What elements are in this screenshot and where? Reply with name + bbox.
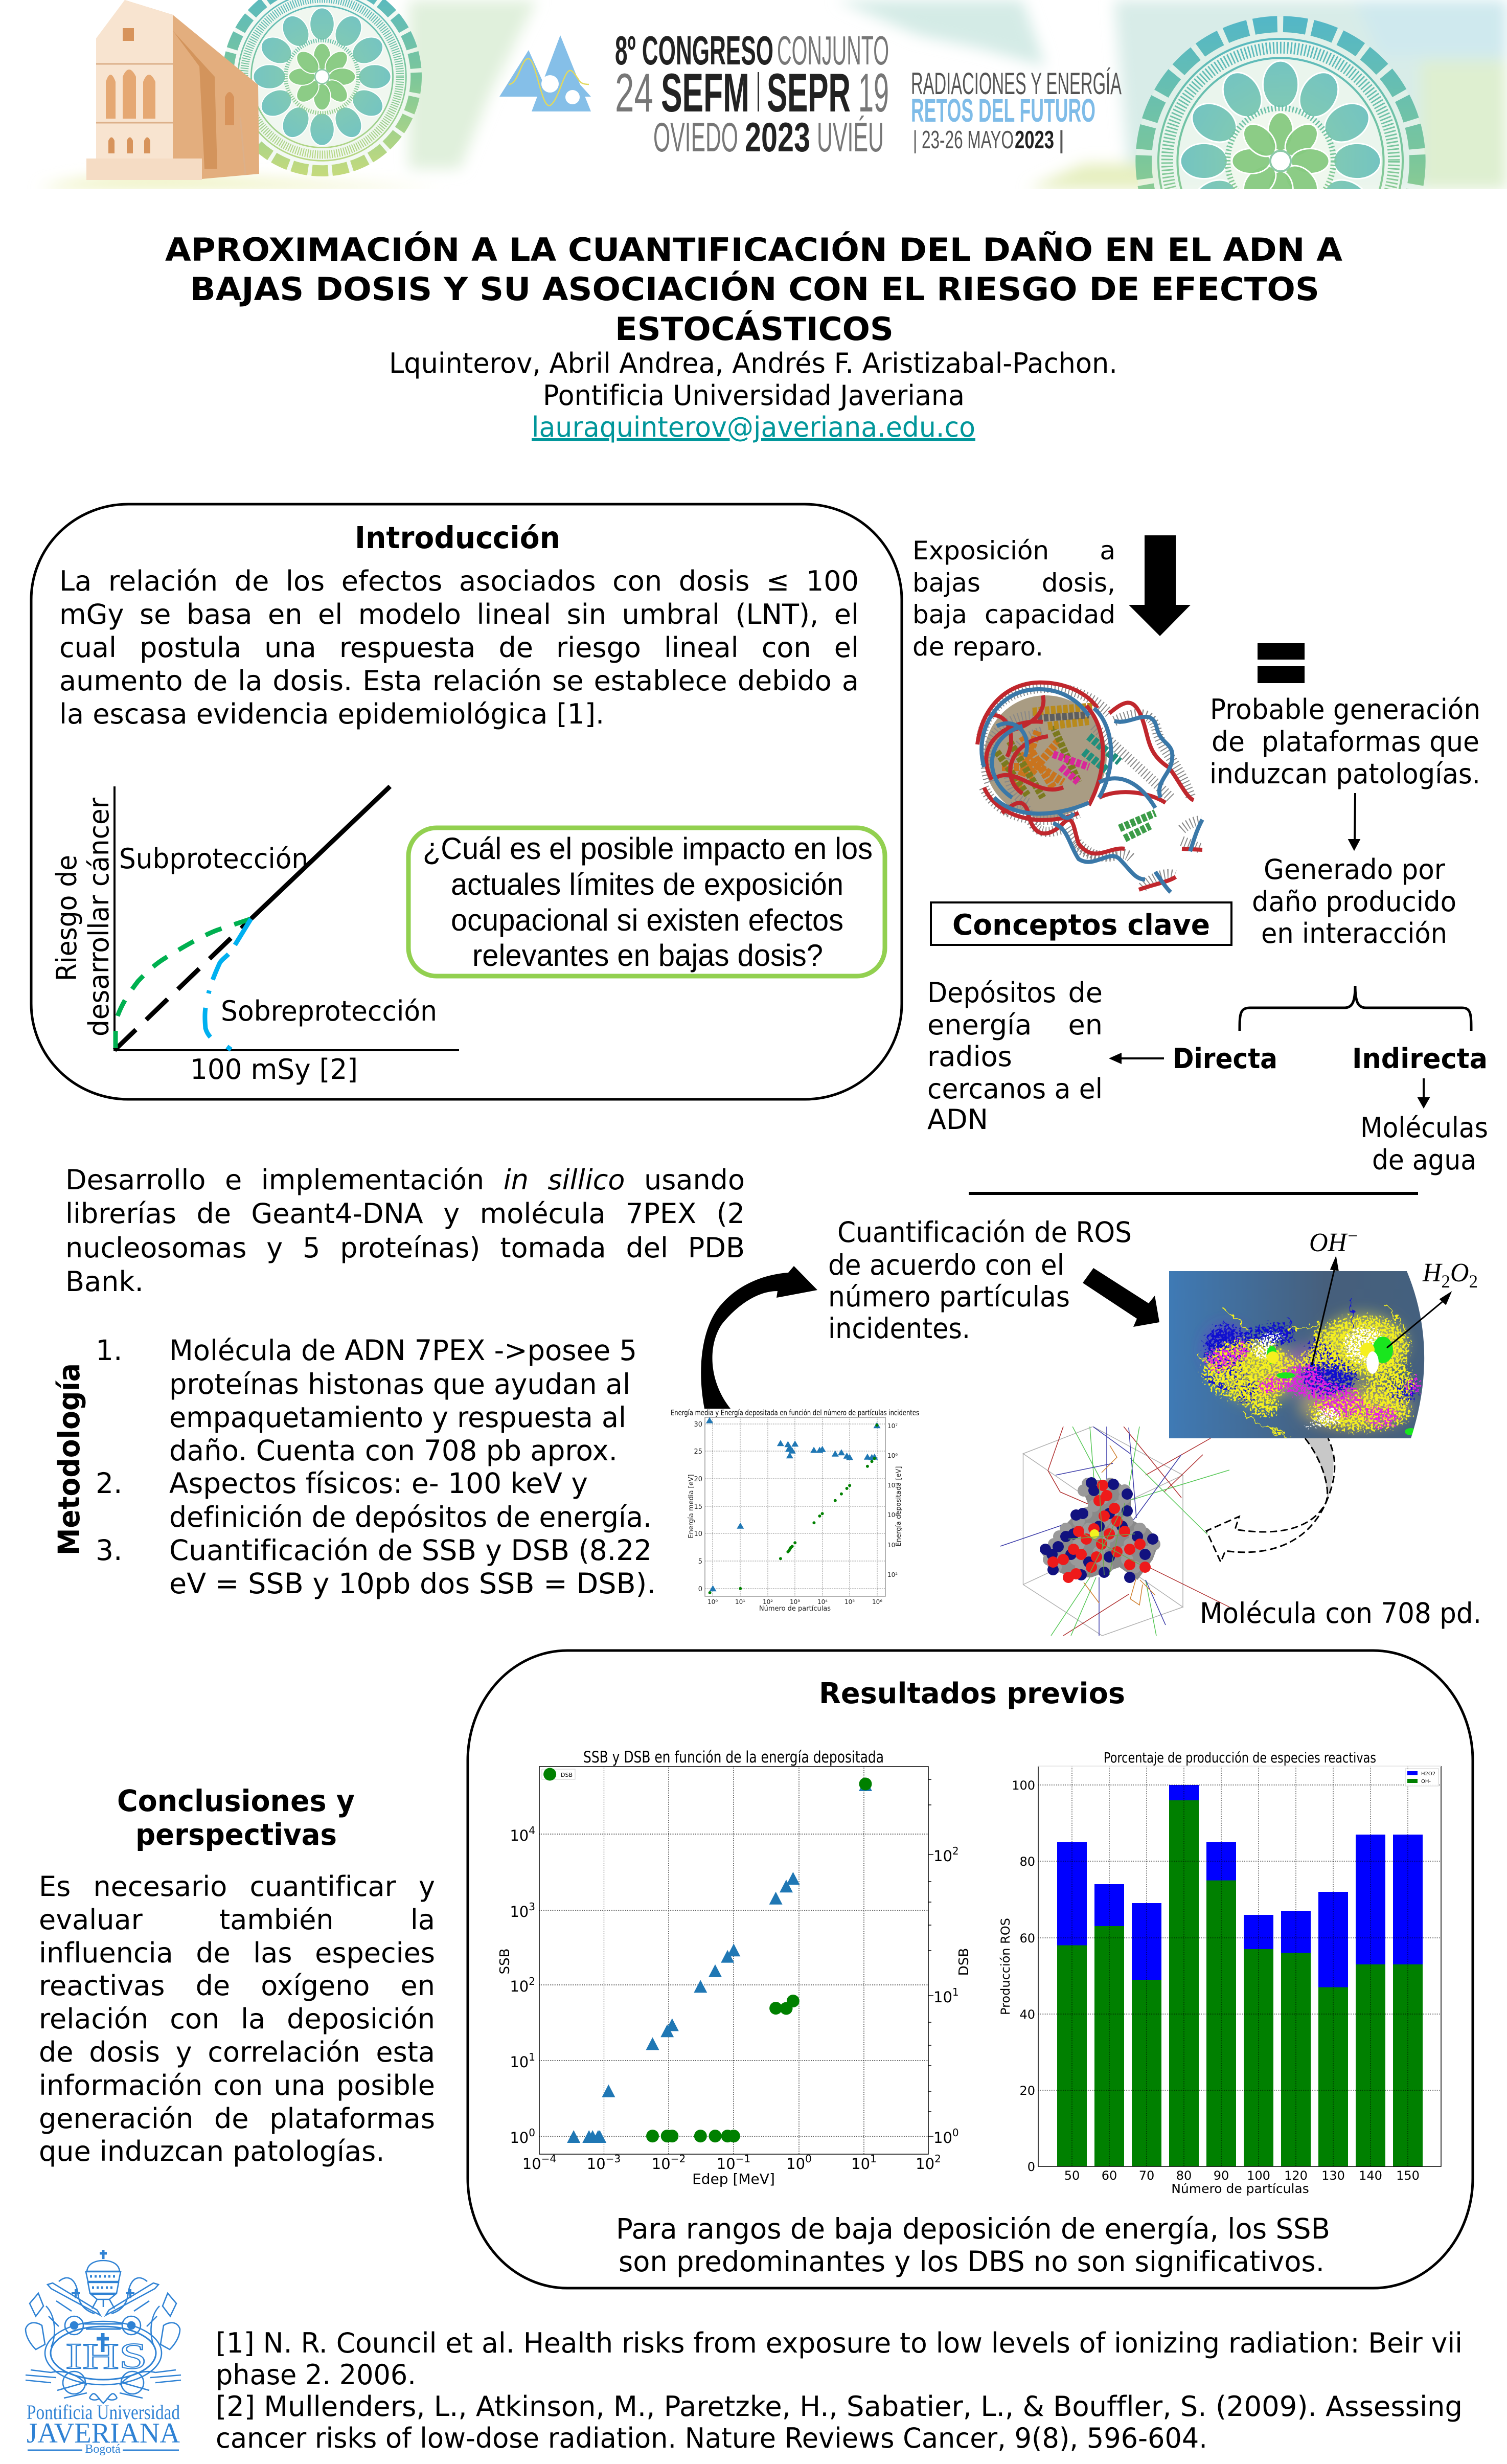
chart: energía media y depositada: 15 [694,1503,702,1511]
text: exposición [912,535,1115,668]
text: desarrollo: nucleosomas y 5 proteínas) tomada del PDB [65,1232,745,1264]
congress name [615,36,1122,153]
heading: conclusiones: perspectivas [135,1817,337,1852]
congress name: RADIACIONES Y ENERGÍA [911,66,1122,101]
panel: metodología [52,1163,1481,1636]
chart: energía media y depositada: 25 [694,1448,702,1456]
chart: SSB y DSB: DSB [956,1948,972,1976]
text: depósitos de energía: energía [927,1009,1032,1041]
box: conceptos clave: Conceptos clave [952,909,1210,942]
chart: porcentaje ROS: 80 [1176,2168,1192,2183]
chart: SSB y DSB: 0 [529,2127,535,2139]
congress name: UVIÉU [817,115,884,161]
list: pasos: Cuantificación de SSB y DSB (8.22 [169,1534,652,1567]
authors and affiliation: Lquinterov, Abril Andrea, Andrés F. Aristizabal-Pachon. [389,347,1117,379]
references [216,2327,1463,2454]
text: moléculas de agua [1360,1112,1488,1176]
chart: energía media y depositada: 10⁴ [817,1598,828,1606]
intro text: aumento de la dosis. Esta relación se establece debido a [59,665,859,697]
chart: porcentaje ROS: 80 [1019,1855,1035,1869]
y-axis label [51,797,115,1036]
panel: conceptos clave [912,535,1488,1176]
text: probable generación: de plataformas que [1212,726,1479,758]
chart: SSB y DSB: 10 [510,1827,529,1844]
text: desarrollo: Desarrollo e implementación in sillico usando [65,1164,745,1196]
divider line [969,1192,1418,1195]
chart: SSB y DSB: 0 [952,2127,959,2139]
chart: SSB y DSB: 10 [933,1988,952,2006]
heading: conclusiones [117,1783,355,1852]
text: cuantificación de ROS: número partículas [828,1280,1070,1313]
chart: porcentaje ROS: Producción ROS [998,1918,1013,2015]
intro text: la escasa evidencia epidemiológica [1]. [59,698,604,730]
y-axis label: desarrollar cáncer [83,797,115,1036]
chart: SSB y DSB: SSB y DSB en función de la energía depositada [583,1748,884,1767]
chart: energía media y depositada: 10⁵ [887,1482,898,1489]
label: OH-: OH [1309,1228,1348,1257]
chart: SSB y DSB: 1 [952,1986,959,1998]
callout: research question: relevantes en bajas dosis? [472,938,823,973]
icon: equals sign [1258,643,1305,683]
chart: energía media y depositada: 10⁶ [887,1452,898,1459]
references: phase 2. 2006. [216,2359,416,2391]
references: [2] Mullenders, L., Atkinson, M., Paretzke, H., Sabatier, L., & Bouffler, S. (2009). Assessing [216,2390,1463,2423]
chart: SSB y DSB: 10 [851,2155,870,2173]
chart: SSB y DSB: 10 [510,2053,529,2071]
chart: SSB y DSB: 10 [933,1847,952,1865]
text: conclusiones: de dosis y correlación esta [39,2036,435,2068]
chart: SSB y DSB: 10 [522,2155,541,2173]
list: pasos: empaquetamiento y respuesta al [169,1401,626,1434]
chart: porcentaje ROS: Porcentaje de producción de especies reactivas [1104,1749,1376,1766]
label: OH-: − [1346,1226,1359,1246]
label: H2O2: 2 [1442,1271,1450,1292]
chart: energía media y depositada: Energía depositada [eV] [895,1466,903,1546]
image: molecule with tracks [1000,1427,1229,1636]
chart: energía media y depositada: Energía media [eV] [688,1474,695,1539]
chart: SSB y DSB: 0 [805,2153,812,2165]
university name [27,2401,180,2456]
label: H2O2: 2 [1469,1271,1478,1292]
authors and affiliation: Pontificia Universidad Javeriana [543,379,965,412]
text: conclusiones: Es necesario cuantificar y [39,1870,435,1903]
text: probable generación [1209,693,1480,790]
arrow: indirecta to moléculas [1419,1078,1428,1106]
congress name: OVIEDO [653,115,738,161]
congress name: 2023 [745,115,810,161]
chart: energía media y depositada: 10³ [887,1542,898,1549]
chart: porcentaje ROS: 60 [1102,2168,1117,2183]
list: pasos: eV = SSB y 10pb dos SSB = DSB). [169,1567,656,1600]
text: generado por: daño producido [1252,886,1456,918]
references: [1] N. R. Council et al. Health risks from exposure to low levels of ionizing radiation: Beir vii [216,2327,1463,2359]
arrow: directa to depósitos [1111,1054,1164,1063]
text: depósitos de energía: Depósitos [927,977,1056,1009]
arrow: dashed curved with gray fill [1206,1438,1335,1562]
panel: resultados previos [468,1651,1473,2288]
text: desarrollo: librerías de Geant4-DNA y molécula 7PEX (2 [65,1197,745,1230]
congress name: | [1058,126,1065,154]
text: conclusiones: evaluar también la [39,1904,435,1936]
university name: Bogotá [85,2443,121,2456]
congress name: | 23-26 MAYO [913,126,1014,154]
heading: metodología: Metodología [52,1363,86,1555]
list: pasos: definición de depósitos de energía. [169,1501,652,1533]
text: cuantificación de ROS [828,1216,1132,1345]
text: moléculas de agua: de agua [1372,1144,1476,1176]
chart: porcentaje ROS: 20 [1019,2084,1035,2098]
chart: energía media y depositada: 10¹ [735,1598,745,1606]
image: ROS tracks [1169,1271,1430,1440]
text: depósitos de energía: en [1068,1009,1103,1041]
chart: porcentaje ROS: OH- [1421,1779,1431,1784]
list: pasos: Molécula de ADN 7PEX ->posee 5 [169,1334,637,1367]
chart: porcentaje ROS: 0 [1028,2160,1035,2174]
text: exposición: baja capacidad [912,600,1115,629]
title: ESTOCÁSTICOS [615,310,894,348]
chart: energía media y depositada: 10³ [790,1598,800,1606]
university name: JAVERIANA [27,2417,180,2449]
chart: SSB y DSB: SSB [497,1949,513,1974]
text: generado por [1252,853,1456,950]
text: conclusiones: relación con la deposición [39,2003,435,2035]
label: indirecta: Indirecta [1352,1043,1488,1075]
chart: energía media y depositada [671,1408,919,1613]
authors and affiliation [389,347,1117,443]
chart: SSB y DSB: 2 [952,1845,959,1857]
title: APROXIMACIÓN A LA CUANTIFICACIÓN DEL DAÑO EN EL ADN A [165,231,1342,268]
chart: SSB y DSB: −2 [671,2153,686,2165]
arrow: H2O2 pointer [1387,1293,1450,1348]
chart: SSB y DSB: 2 [529,1975,535,1987]
title [165,231,1342,348]
icon: DNA molecule [977,683,1202,892]
chart: porcentaje ROS: 50 [1064,2168,1080,2183]
label: directa: Directa [1173,1043,1277,1075]
congress name: 2023 [1015,126,1054,154]
arrow: OH- pointer [1312,1258,1338,1365]
chart: SSB y DSB: −1 [736,2153,750,2165]
chart: porcentaje ROS: 90 [1214,2168,1229,2183]
chart: porcentaje ROS: 150 [1396,2168,1420,2183]
chart: SSB y DSB: 4 [529,1824,535,1837]
callout: research question: actuales límites de exposición [451,867,843,901]
chart: porcentaje ROS: 60 [1019,1931,1035,1946]
intro text: cual postula una respuesta de riesgo lineal con el [59,631,859,664]
arrow: diagonal black [1083,1268,1159,1327]
header banner [47,0,1507,189]
chart: energía media y depositada: 10⁷ [887,1422,898,1430]
chart: porcentaje ROS: Número de partículas [1171,2181,1309,2196]
list: pasos: proteínas histonas que ayudan al [169,1368,630,1400]
congress name: 8º CONGRESO [615,28,773,73]
callout: research question [408,828,885,976]
chart: SSB y DSB: 10 [933,2129,952,2146]
icon: congress logo [499,35,591,111]
text: conclusiones [39,1870,435,2177]
chart: energía media y depositada: Número de partículas [759,1605,831,1613]
chart: SSB y DSB: 2 [934,2153,941,2165]
rosette left [223,0,421,176]
chart: porcentaje ROS: H2O2 [1421,1771,1435,1777]
chart: energía media y depositada: 10² [887,1571,898,1578]
arrow: big down [1129,535,1191,636]
label: molécula con 708 pd: Molécula con 708 pd. [1200,1597,1481,1630]
heading: introducción: Introducción [355,520,560,555]
chart: porcentaje ROS: 120 [1284,2168,1308,2183]
text: conclusiones: influencia de las especies [39,1937,435,1969]
chart: energía media y depositada: 0 [698,1586,702,1593]
chart: SSB y DSB: 10 [510,1903,529,1920]
chart: porcentaje ROS: 100 [1247,2168,1270,2183]
panel: conclusiones y perspectivas [39,1783,435,2177]
text: depósitos de energía: cercanos a el [927,1073,1103,1105]
chart: SSB y DSB: 1 [529,2051,535,2063]
logo: Pontificia Universidad Javeriana [26,2250,181,2456]
x-axis label: 100 mSy [2] [190,1053,358,1086]
text: desarrollo: Bank. [65,1265,144,1298]
text: moléculas de agua: Moléculas [1360,1112,1488,1144]
chart: energía media y depositada: 10 [694,1530,702,1538]
chart: SSB y DSB: 1 [870,2153,877,2165]
arrow: thin down [1350,793,1359,849]
chart: SSB y DSB: −4 [541,2153,556,2165]
panel: introducción [31,504,902,1099]
text: probable generación: induzcan patologías. [1209,758,1480,790]
chart: SSB y DSB: 10 [717,2155,736,2173]
bracket [1240,986,1471,1031]
chart: energía media y depositada: 10² [763,1598,773,1606]
chart: SSB y DSB: 10 [786,2155,805,2173]
chart: SSB y DSB [497,1748,972,2187]
chart: porcentaje ROS: 70 [1139,2168,1154,2183]
university name: Pontificia Universidad [27,2401,180,2424]
heading: resultados previos: Resultados previos [819,1677,1125,1710]
list: pasos: daño. Cuenta con 708 pb aprox. [169,1434,618,1467]
chart: energía media y depositada: 20 [694,1476,702,1483]
text: depósitos de energía: ADN [927,1103,988,1136]
list: pasos: 1. [96,1334,122,1367]
congress name: RETOS DEL FUTURO [911,92,1095,129]
arrow: curved black [701,1266,817,1409]
list: pasos [96,1334,656,1600]
chart: SSB y DSB: Edep [MeV] [692,2171,775,2187]
text: depósitos de energía: radios [927,1041,1012,1073]
chart: porcentaje ROS: 130 [1321,2168,1345,2183]
references: cancer risks of low-dose radiation. Nature Reviews Cancer, 9(8), 596-604. [216,2422,1207,2454]
chart: SSB y DSB: 10 [916,2155,934,2173]
title: BAJAS DOSIS Y SU ASOCIACIÓN CON EL RIESGO DE EFECTOS [190,270,1319,308]
text: conclusiones: información con una posible [39,2069,435,2101]
callout: research question: ¿Cuál es el posible impacto en los [423,831,873,866]
chart: SSB y DSB: DSB [561,1772,573,1778]
icon: church [86,0,259,180]
congress name: SEFM [661,62,749,123]
chart: porcentaje ROS: 100 [1012,1778,1035,1793]
caption: resultados [616,2212,1330,2278]
chart: SSB y DSB: 10 [587,2155,606,2173]
text: conclusiones: reactivas de oxígeno en [39,1970,435,2002]
caption: resultados: son predominantes y los DBS no son significativos. [619,2245,1325,2278]
caption: resultados: Para rangos de baja deposición de energía, los SSB [616,2212,1330,2245]
authors and affiliation: lauraquinterov@javeriana.edu.co [532,411,975,443]
text: cuantificación de ROS: incidentes. [828,1312,970,1345]
callout: research question: ocupacional si existen efectos [451,903,843,937]
text: generado por: Generado por [1264,853,1446,886]
y-axis label: Riesgo de [51,855,83,981]
intro text [59,564,859,733]
label: sobreprotección: Sobreprotección [221,995,437,1027]
list: pasos: Aspectos físicos: e- 100 keV y [169,1467,588,1500]
intro text: mGy se basa en el modelo lineal sin umbral (LNT), el [59,598,859,630]
label: H2O2: O [1450,1258,1469,1287]
text: probable generación: Probable generación [1210,693,1480,726]
text: depósitos de energía: de [1068,977,1103,1009]
text: depósitos de energía [927,977,1103,1136]
congress name: 24 [615,62,653,123]
icon: crest [26,2250,181,2403]
chart: energía media y depositada: 10⁰ [707,1598,718,1606]
list: pasos: 3. [96,1534,122,1567]
text: exposición: bajas dosis, [912,568,1115,597]
chart: energía media y depositada: 30 [694,1421,702,1429]
label: subprotección: Subprotección [119,843,308,875]
watercolor background [38,0,1507,189]
text: exposición: de reparo. [912,632,1043,662]
chart: energía media y depositada: 10⁵ [844,1598,855,1606]
text: conclusiones: generación de plataformas [39,2103,435,2135]
crest letters: IHS [65,2336,147,2377]
text: cuantificación de ROS: de acuerdo con el [828,1249,1064,1281]
chart: porcentaje ROS: 140 [1359,2168,1382,2183]
text: desarrollo [65,1163,745,1301]
congress name: SEPR [767,62,851,123]
chart: SSB y DSB: −3 [606,2153,621,2165]
chart: LNT model [51,786,459,1086]
text: conclusiones: que induzcan patologías. [39,2135,384,2167]
congress name: 19 [858,62,889,123]
chart: SSB y DSB: 3 [529,1901,535,1913]
list: pasos: 2. [96,1467,122,1500]
chart: porcentaje ROS [998,1749,1441,2196]
text: cuantificación de ROS: Cuantificación de ROS [837,1216,1132,1249]
chart: SSB y DSB: 10 [510,2129,529,2146]
chart: SSB y DSB: 10 [652,2155,671,2173]
rosette right [1135,16,1426,189]
chart: porcentaje ROS: 40 [1019,2007,1035,2022]
mini chart title: Energía media y Energía depositada en función del número de partículas incidentes [671,1408,919,1417]
chart: energía media y depositada: 5 [698,1558,702,1566]
chart: energía media y depositada: 10⁶ [872,1598,882,1606]
heading: conclusiones: Conclusiones y [117,1783,355,1818]
text: generado por: en interacción [1261,917,1447,950]
text: exposición: Exposición a [912,536,1115,566]
intro text: La relación de los efectos asociados con dosis ≤ 100 [59,565,859,597]
chart: energía media y depositada: 10⁴ [887,1511,898,1519]
box: conceptos clave [931,902,1231,945]
congress name: CONJUNTO [777,28,889,73]
label: H2O2: H [1423,1258,1442,1287]
chart: SSB y DSB: 10 [510,1978,529,1995]
